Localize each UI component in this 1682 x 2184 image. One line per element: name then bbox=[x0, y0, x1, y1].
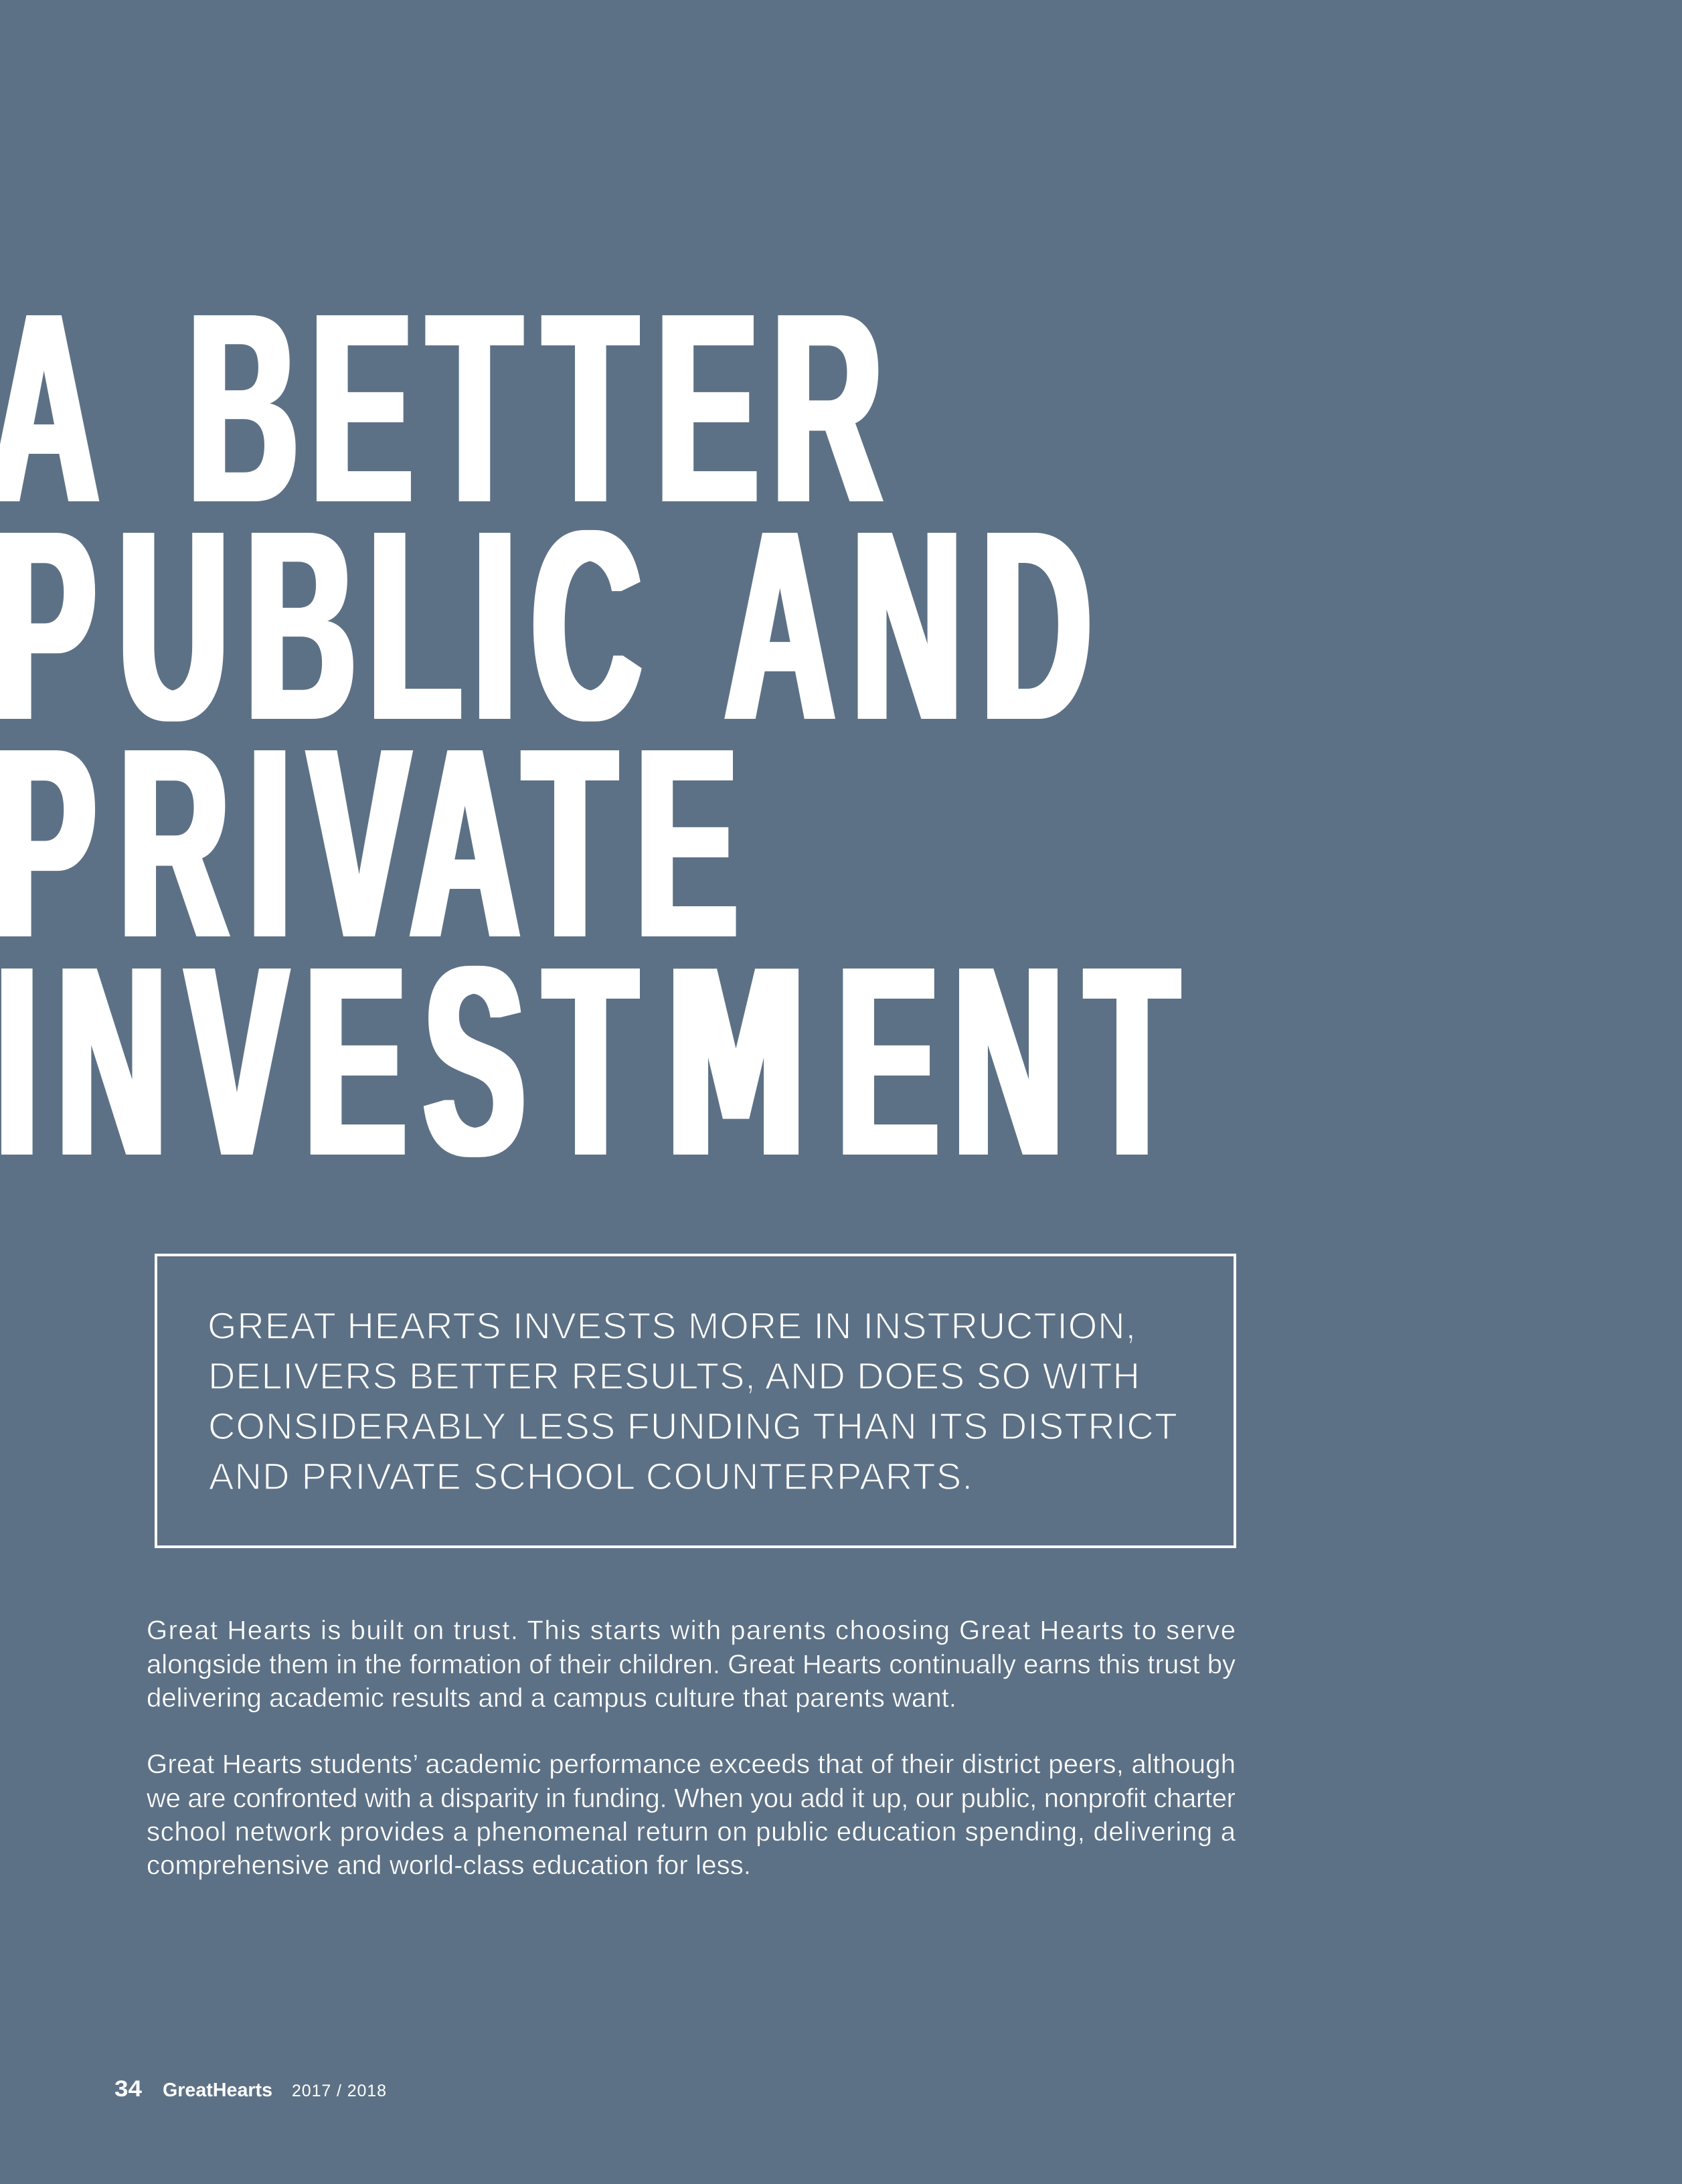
body paragraph 2: we are confronted with a disparity in funding. When you add it up, our public, nonprofit charter bbox=[146, 1784, 1236, 1813]
year: 2017 / 2018 bbox=[292, 2082, 386, 2100]
body paragraph 2 bbox=[146, 1750, 1236, 1880]
title line 3: PRIVATE bbox=[0, 693, 737, 994]
body paragraph 2: Great Hearts students’ academic performance exceeds that of their district peers, although bbox=[147, 1750, 1236, 1779]
body paragraph 1: Great Hearts is built on trust. This starts with parents choosing Great Hearts to serve bbox=[147, 1616, 1236, 1645]
callout border bbox=[156, 1255, 1235, 1547]
title line 4: INVESTMENT bbox=[0, 911, 1178, 1215]
body paragraph 2: comprehensive and world-class education for less. bbox=[147, 1851, 751, 1880]
callout text bbox=[207, 1305, 1177, 1497]
body paragraph 1: alongside them in the formation of their children. Great Hearts continually earns this trust by bbox=[147, 1650, 1236, 1679]
callout text: GREAT HEARTS INVESTS MORE IN INSTRUCTION, bbox=[207, 1305, 1136, 1347]
body paragraph 2: school network provides a phenomenal return on public education spending, delivering a bbox=[147, 1817, 1236, 1847]
callout text: DELIVERS BETTER RESULTS, AND DOES SO WITH bbox=[208, 1355, 1140, 1397]
body paragraph 1 bbox=[147, 1616, 1236, 1713]
callout text: CONSIDERABLY LESS FUNDING THAN ITS DISTRICT bbox=[208, 1405, 1177, 1447]
brand name: GreatHearts bbox=[163, 2080, 272, 2101]
title line 1: A BETTER bbox=[0, 258, 882, 559]
callout text: AND PRIVATE SCHOOL COUNTERPARTS. bbox=[209, 1455, 973, 1497]
title bbox=[0, 258, 1178, 1215]
body paragraph 1: delivering academic results and a campus culture that parents want. bbox=[147, 1683, 956, 1713]
callout box bbox=[156, 1255, 1235, 1547]
title line 2: PUBLIC AND bbox=[0, 475, 1091, 776]
page number: 34 bbox=[114, 2076, 142, 2102]
footer bbox=[114, 2076, 386, 2102]
